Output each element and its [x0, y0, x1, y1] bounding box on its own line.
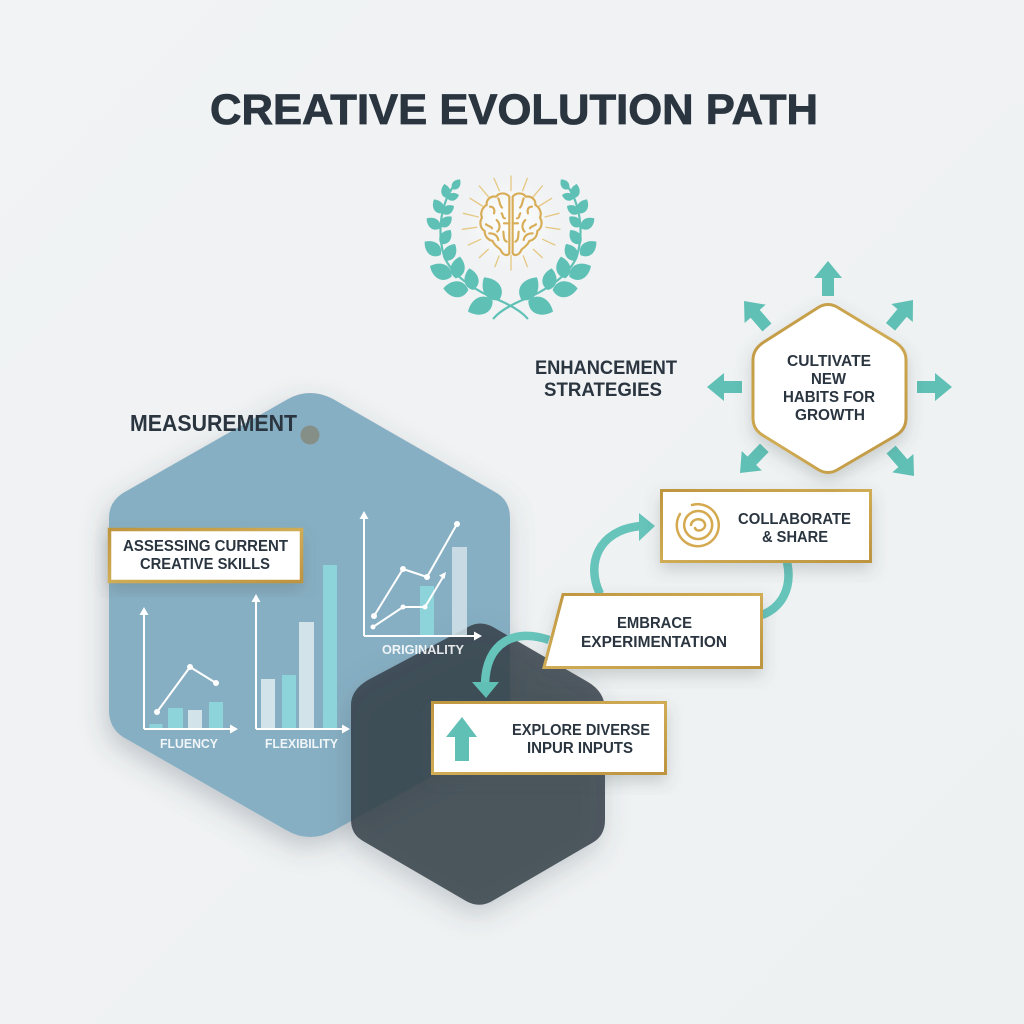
card: explore diverse inputs: INPUR INPUTS	[527, 740, 633, 757]
panel: cultivate new habits hexagon: CULTIVATE	[787, 353, 871, 370]
chart: originality: ORIGINALITY	[382, 643, 465, 657]
card: explore diverse inputs	[432, 702, 666, 774]
panel: measurement hexagon	[109, 393, 510, 837]
card: collaborate and share	[662, 490, 870, 562]
card: embrace experimentation: EXPERIMENTATION	[581, 634, 727, 651]
panel: cultivate new habits hexagon	[753, 304, 906, 472]
heading: measurement: MEASUREMENT	[130, 410, 297, 436]
card: embrace experimentation	[544, 594, 762, 668]
brain	[480, 193, 542, 255]
laurel: left branch	[420, 177, 527, 320]
arrows: radiating from habits hexagon	[707, 261, 952, 485]
icon: laurel wreath with brain	[420, 176, 601, 320]
callout: assessing current creative skills	[110, 530, 302, 582]
callout: assessing current creative skills: CREATIVE SKILLS	[140, 556, 270, 573]
heading: enhancement strategies: ENHANCEMENT	[535, 358, 677, 379]
rays around brain	[462, 176, 560, 270]
chart: flexibility	[252, 565, 350, 751]
arrow: collaborate to experimentation	[762, 562, 788, 615]
icon: up arrow	[446, 717, 477, 761]
panel: dark hexagon	[351, 624, 605, 905]
arrow: experimentation to explore	[472, 636, 549, 698]
chart: fluency	[140, 607, 238, 751]
chart: flexibility: FLEXIBILITY	[265, 737, 339, 751]
card: collaborate and share: COLLABORATE	[738, 511, 851, 528]
card: collaborate and share: & SHARE	[762, 529, 828, 546]
chart: originality	[360, 511, 482, 657]
title: CREATIVE EVOLUTION PATH	[210, 87, 818, 134]
chart: fluency: FLUENCY	[160, 737, 219, 751]
arrow: experimentation to collaborate	[594, 513, 655, 594]
laurel: right branch	[494, 177, 601, 320]
panel: cultivate new habits hexagon: NEW	[811, 371, 846, 388]
icon: spiral	[677, 504, 719, 546]
heading: enhancement strategies	[535, 358, 677, 401]
panel: cultivate new habits hexagon: HABITS FOR	[783, 389, 875, 406]
panel: cultivate new habits hexagon: GROWTH	[795, 407, 865, 424]
callout: assessing current creative skills: ASSESSING CURRENT	[123, 538, 289, 555]
marker dot	[300, 426, 320, 444]
heading: enhancement strategies: STRATEGIES	[544, 380, 662, 401]
card: embrace experimentation: EMBRACE	[617, 615, 692, 632]
card: explore diverse inputs: EXPLORE DIVERSE	[512, 722, 650, 739]
